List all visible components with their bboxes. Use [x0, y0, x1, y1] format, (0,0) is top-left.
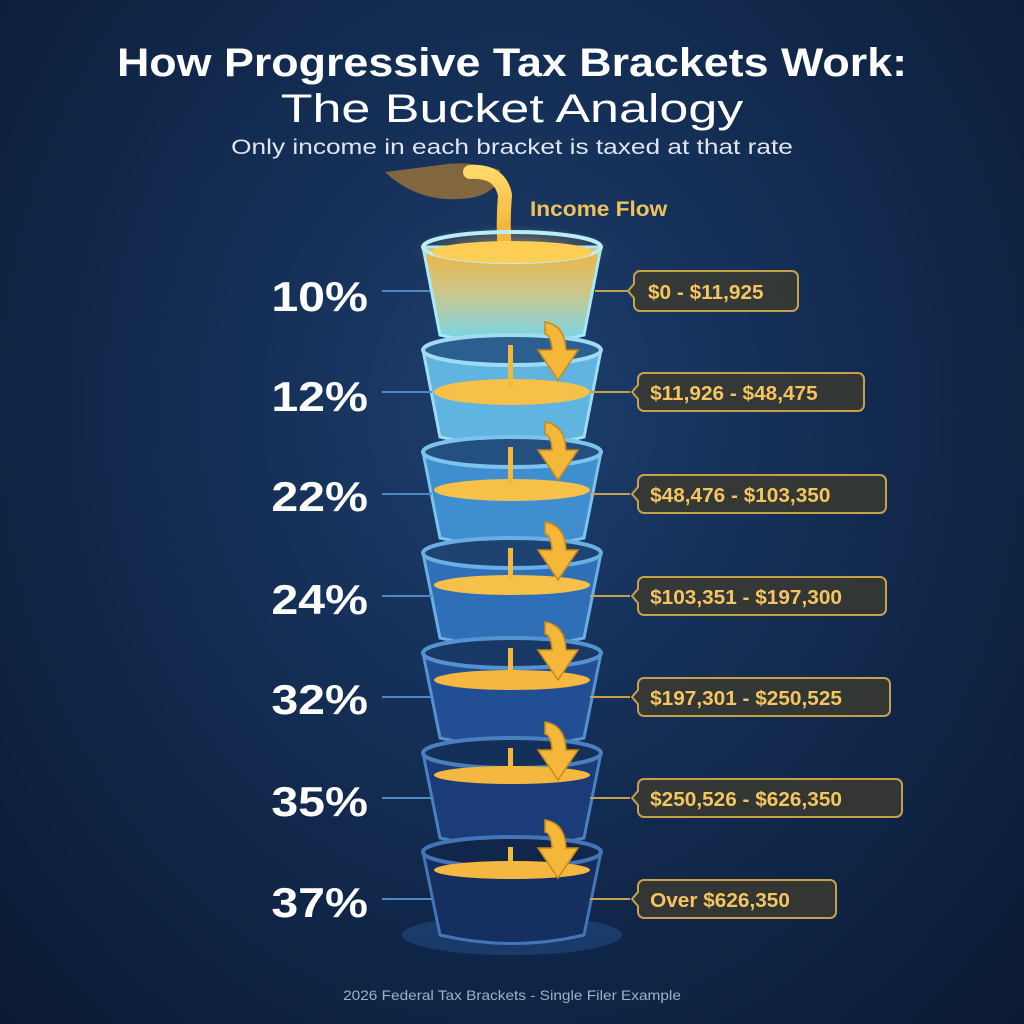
bucket 32%: [423, 638, 601, 746]
subtitle: The Bucket Analogy: [281, 87, 743, 131]
range texts: $250,526 - $626,350: [650, 789, 842, 811]
range boxes: [628, 271, 902, 918]
range texts: Over $626,350: [650, 890, 790, 912]
rate labels: 35%: [271, 778, 368, 825]
buckets: [402, 225, 622, 955]
bucket 37%: [402, 837, 622, 955]
bucket 12%: [423, 335, 601, 446]
title: How Progressive Tax Brackets Work:: [117, 41, 907, 85]
rate labels: [271, 273, 368, 926]
tagline: Only income in each bracket is taxed at that rate: [231, 136, 793, 159]
bucket 35%: [423, 738, 601, 846]
rate labels: 24%: [271, 576, 368, 623]
bucket 24%: [423, 538, 601, 646]
rate labels: 22%: [271, 473, 368, 520]
range texts: [648, 282, 842, 912]
arrows: [538, 322, 578, 878]
range texts: $11,926 - $48,475: [650, 383, 818, 405]
connector lines: [382, 291, 630, 899]
center stream: [507, 260, 514, 880]
footer: 2026 Federal Tax Brackets - Single Filer Example: [343, 987, 681, 1003]
pitcher and pouring stream: [385, 163, 668, 262]
rate labels: 12%: [271, 373, 368, 420]
range texts: $197,301 - $250,525: [650, 688, 842, 710]
stream between buckets: [508, 345, 513, 866]
bucket 10%: [412, 225, 612, 344]
rate labels: 10%: [271, 273, 368, 320]
pitcher and pouring stream: Income Flow: [530, 197, 668, 221]
bucket 22%: [423, 437, 601, 546]
rate labels: 37%: [271, 879, 368, 926]
range texts: $48,476 - $103,350: [650, 485, 830, 507]
rate labels: 32%: [271, 676, 368, 723]
range texts: $0 - $11,925: [648, 282, 764, 304]
range texts: $103,351 - $197,300: [650, 587, 842, 609]
